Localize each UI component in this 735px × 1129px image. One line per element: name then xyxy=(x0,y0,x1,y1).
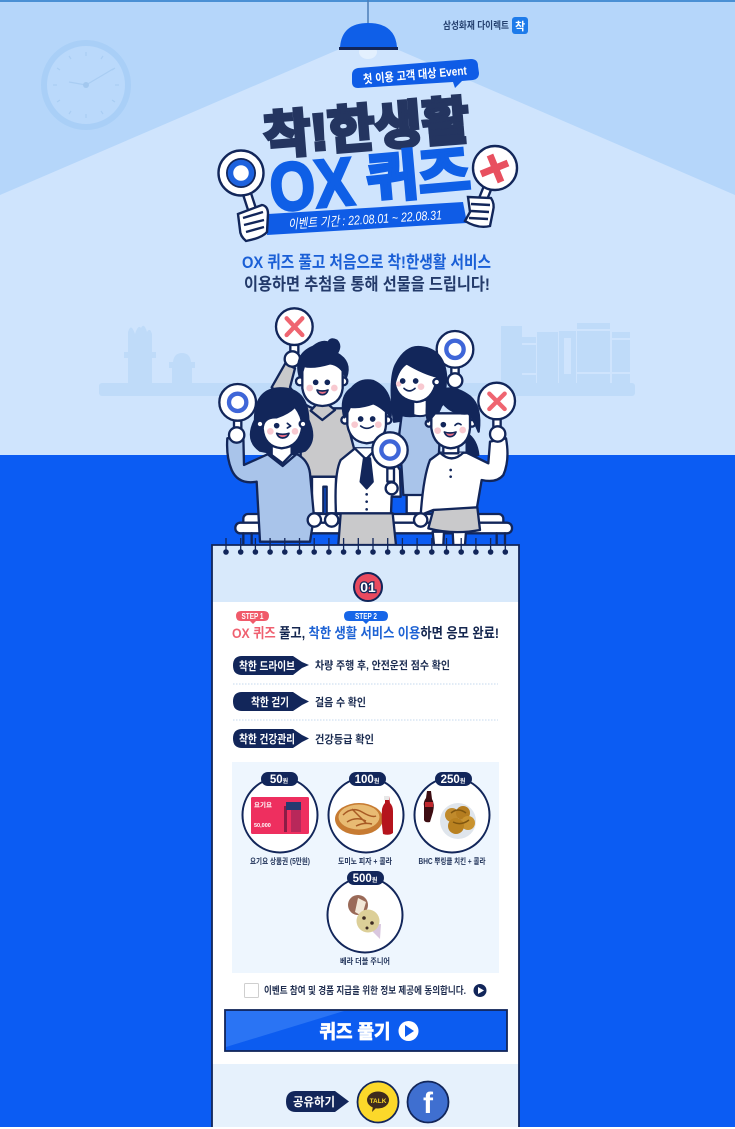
prize: 500 points ice cream: 500원 xyxy=(353,873,378,885)
row: safe driving: 착한 드라이브 xyxy=(239,659,295,673)
event period band: 이벤트 기간 : 22.08.01 ~ 22.08.31 xyxy=(288,207,442,232)
X sign with hand xyxy=(465,146,517,227)
icon: kakao talk: TALK xyxy=(370,1098,387,1105)
prize: 500 points ice cream xyxy=(328,871,402,966)
share label: 공유하기 xyxy=(293,1094,335,1109)
prize: 100 points pizza xyxy=(328,772,404,866)
row: walking: 착한 걷기 xyxy=(251,695,289,709)
step 1 tag: STEP 1 xyxy=(242,612,264,621)
icon: kakao talk xyxy=(358,1082,398,1122)
icon: facebook xyxy=(408,1082,448,1122)
row: walking xyxy=(233,692,366,711)
panel: prizes xyxy=(232,762,499,973)
bench xyxy=(235,514,512,545)
shelf with plants and books xyxy=(99,323,635,396)
illustration: five people holding OX signs on a bench xyxy=(219,308,515,545)
prize: 50 points gift card: 요기요 xyxy=(254,800,272,809)
row: health care: 착한 건강관리 xyxy=(239,732,295,746)
prize: 100 points pizza: 도미노 피자 + 콜라 xyxy=(338,857,393,866)
person: back right woman xyxy=(392,331,473,513)
consent checkbox xyxy=(244,984,486,998)
panel: notepad xyxy=(212,538,519,1127)
step 2 tag: STEP 2 xyxy=(355,612,377,621)
row: health care: 건강등급 확인 xyxy=(315,732,374,746)
prize: 50 points gift card: 50,000 xyxy=(254,823,271,829)
share row xyxy=(286,1082,448,1122)
ceiling lamp xyxy=(339,0,398,59)
notepad spiral rings xyxy=(224,538,508,554)
logo: Samsung Fire Direct: 착 xyxy=(515,19,525,33)
person: front right woman xyxy=(421,383,515,545)
subheading: OX 퀴즈 풀고 처음으로 착!한생활 서비스 xyxy=(242,253,491,272)
event period band xyxy=(267,202,467,235)
prize: 100 points pizza: 100원 xyxy=(355,774,380,786)
prize: 500 points ice cream: 베라 더블 주니어 xyxy=(340,956,390,966)
title: OX 퀴즈: 퀴즈 xyxy=(364,141,473,210)
person: back left man xyxy=(272,308,354,513)
row: safe driving: 차량 주행 후, 안전운전 점수 확인 xyxy=(315,658,450,672)
logo: Samsung Fire Direct xyxy=(443,17,528,34)
prize: 50 points gift card: 요기요 상품권 (5만원) xyxy=(250,856,310,866)
icon: facebook: f xyxy=(423,1087,434,1120)
prize: 50 points gift card: 50원 xyxy=(270,774,289,786)
step 1 tag xyxy=(236,611,269,624)
row: safe driving xyxy=(233,656,450,675)
title: OX 퀴즈 xyxy=(267,133,473,226)
person: front left woman xyxy=(219,384,314,542)
subheading: 이용하면 추첨을 통해 선물을 드립니다! xyxy=(244,275,490,294)
row: health care xyxy=(233,729,374,748)
icon: wall clock xyxy=(44,43,128,127)
row: walking: 걸음 수 확인 xyxy=(315,695,366,709)
person: centre man with tie xyxy=(336,380,408,545)
title: OX 퀴즈: OX xyxy=(267,143,357,226)
logo: Samsung Fire Direct: 삼성화재 다이렉트 xyxy=(443,19,509,32)
instruction line: OX 퀴즈 풀고, 착한 생활 서비스 이용하면 응모 완료! xyxy=(232,625,499,641)
event tag bubble: 첫 이용 고객 대상 Event xyxy=(363,62,467,87)
button: solve quiz xyxy=(225,1010,507,1051)
prize: 250 points chicken: 250원 xyxy=(441,774,466,786)
badge: 01: 01 xyxy=(360,579,376,595)
consent checkbox: 이벤트 참여 및 경품 지급을 위한 정보 제공에 동의합니다. xyxy=(264,984,466,997)
prize: 250 points chicken: BHC 뿌링클 치킨 + 콜라 xyxy=(418,856,486,866)
step 2 tag xyxy=(344,611,388,624)
share label xyxy=(286,1091,349,1112)
button: solve quiz: 퀴즈 풀기 xyxy=(320,1021,390,1043)
O sign with hand xyxy=(218,150,268,241)
prize: 250 points chicken xyxy=(414,772,490,866)
prize: 50 points gift card xyxy=(242,772,318,866)
title: 착!한생활: 착!한생활 xyxy=(261,92,471,165)
hands on knees xyxy=(308,513,427,527)
badge: 01 xyxy=(354,573,382,601)
subheading xyxy=(242,253,491,294)
